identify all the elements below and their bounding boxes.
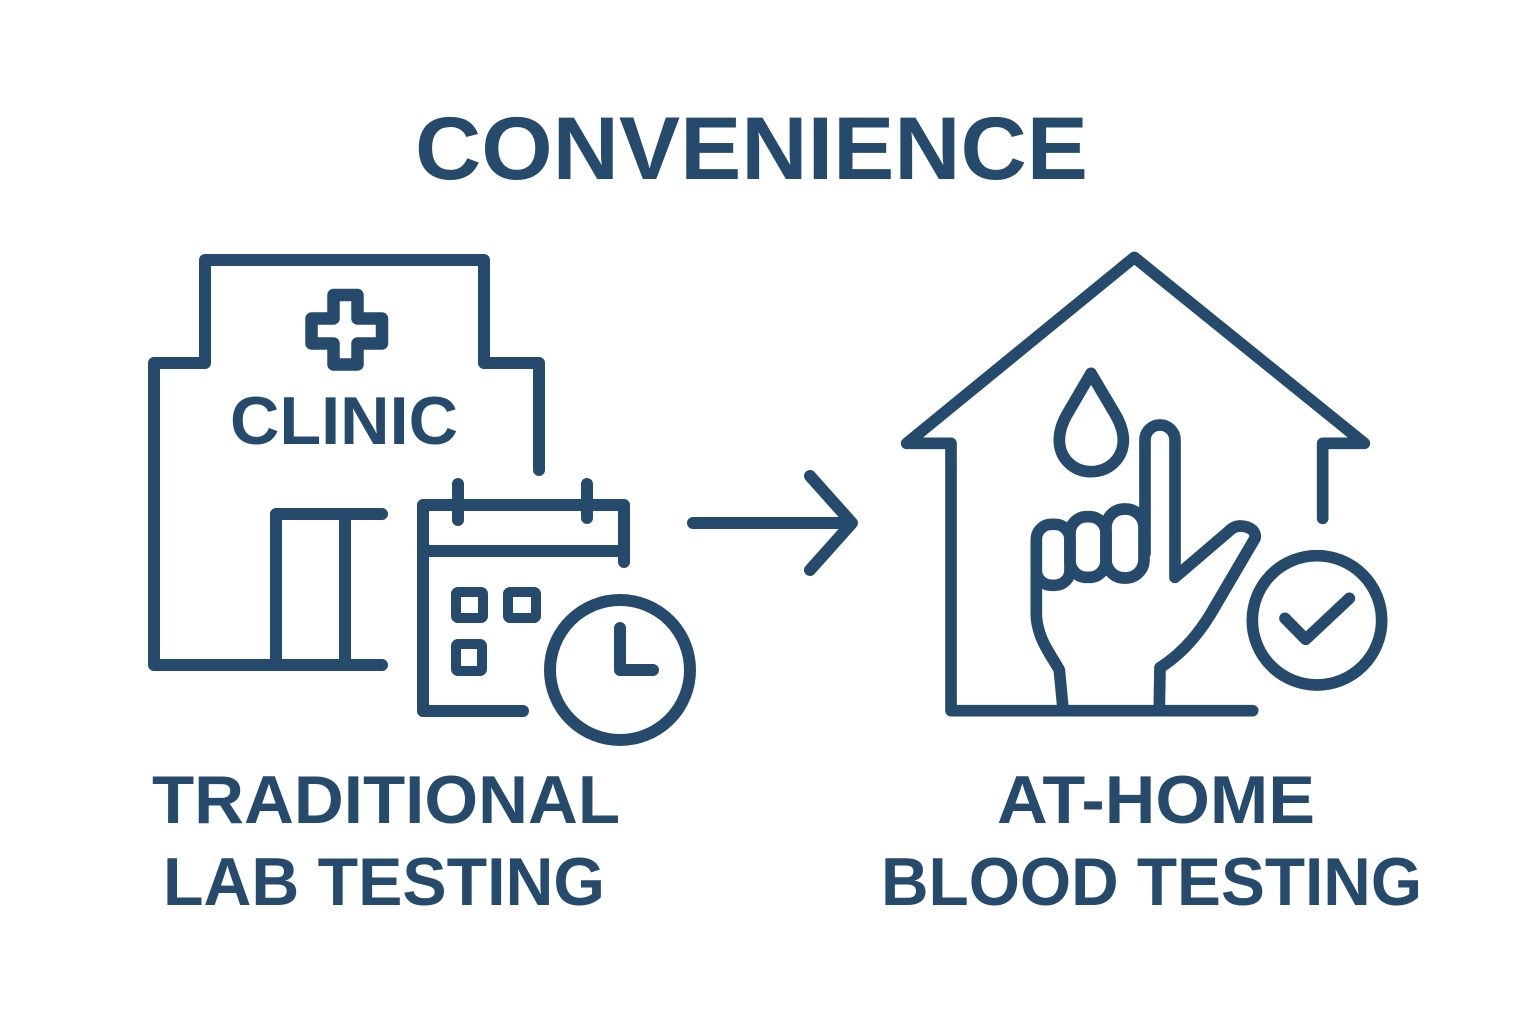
clinic door xyxy=(276,514,382,665)
check badge xyxy=(1252,556,1382,685)
hand xyxy=(1036,425,1255,705)
label: traditional lab testing: TRADITIONAL xyxy=(152,762,620,838)
house outline xyxy=(907,257,1364,711)
label: traditional lab testing: LAB TESTING xyxy=(163,844,605,920)
icon: clinic building xyxy=(154,260,539,665)
clinic sign: CLINIC xyxy=(230,383,458,459)
icon: calendar xyxy=(423,484,624,711)
title: CONVENIENCE xyxy=(415,98,1088,198)
label: at-home blood testing xyxy=(881,762,1422,920)
blood drop xyxy=(1059,373,1123,472)
medical cross xyxy=(312,295,382,364)
palm edge xyxy=(1036,573,1063,705)
icon: clock xyxy=(550,600,690,740)
label: at-home blood testing: AT-HOME xyxy=(997,762,1315,838)
label: at-home blood testing: BLOOD TESTING xyxy=(881,844,1422,920)
label: traditional lab testing xyxy=(152,762,620,920)
calendar day squares xyxy=(456,592,536,671)
arrow xyxy=(693,476,852,570)
calendar frame xyxy=(423,505,624,711)
building outline xyxy=(154,260,539,665)
index finger and thumb xyxy=(1145,425,1255,705)
icon: house with hand and blood drop xyxy=(907,257,1382,711)
curled fingers xyxy=(1036,524,1070,585)
calendar rings xyxy=(458,484,587,520)
